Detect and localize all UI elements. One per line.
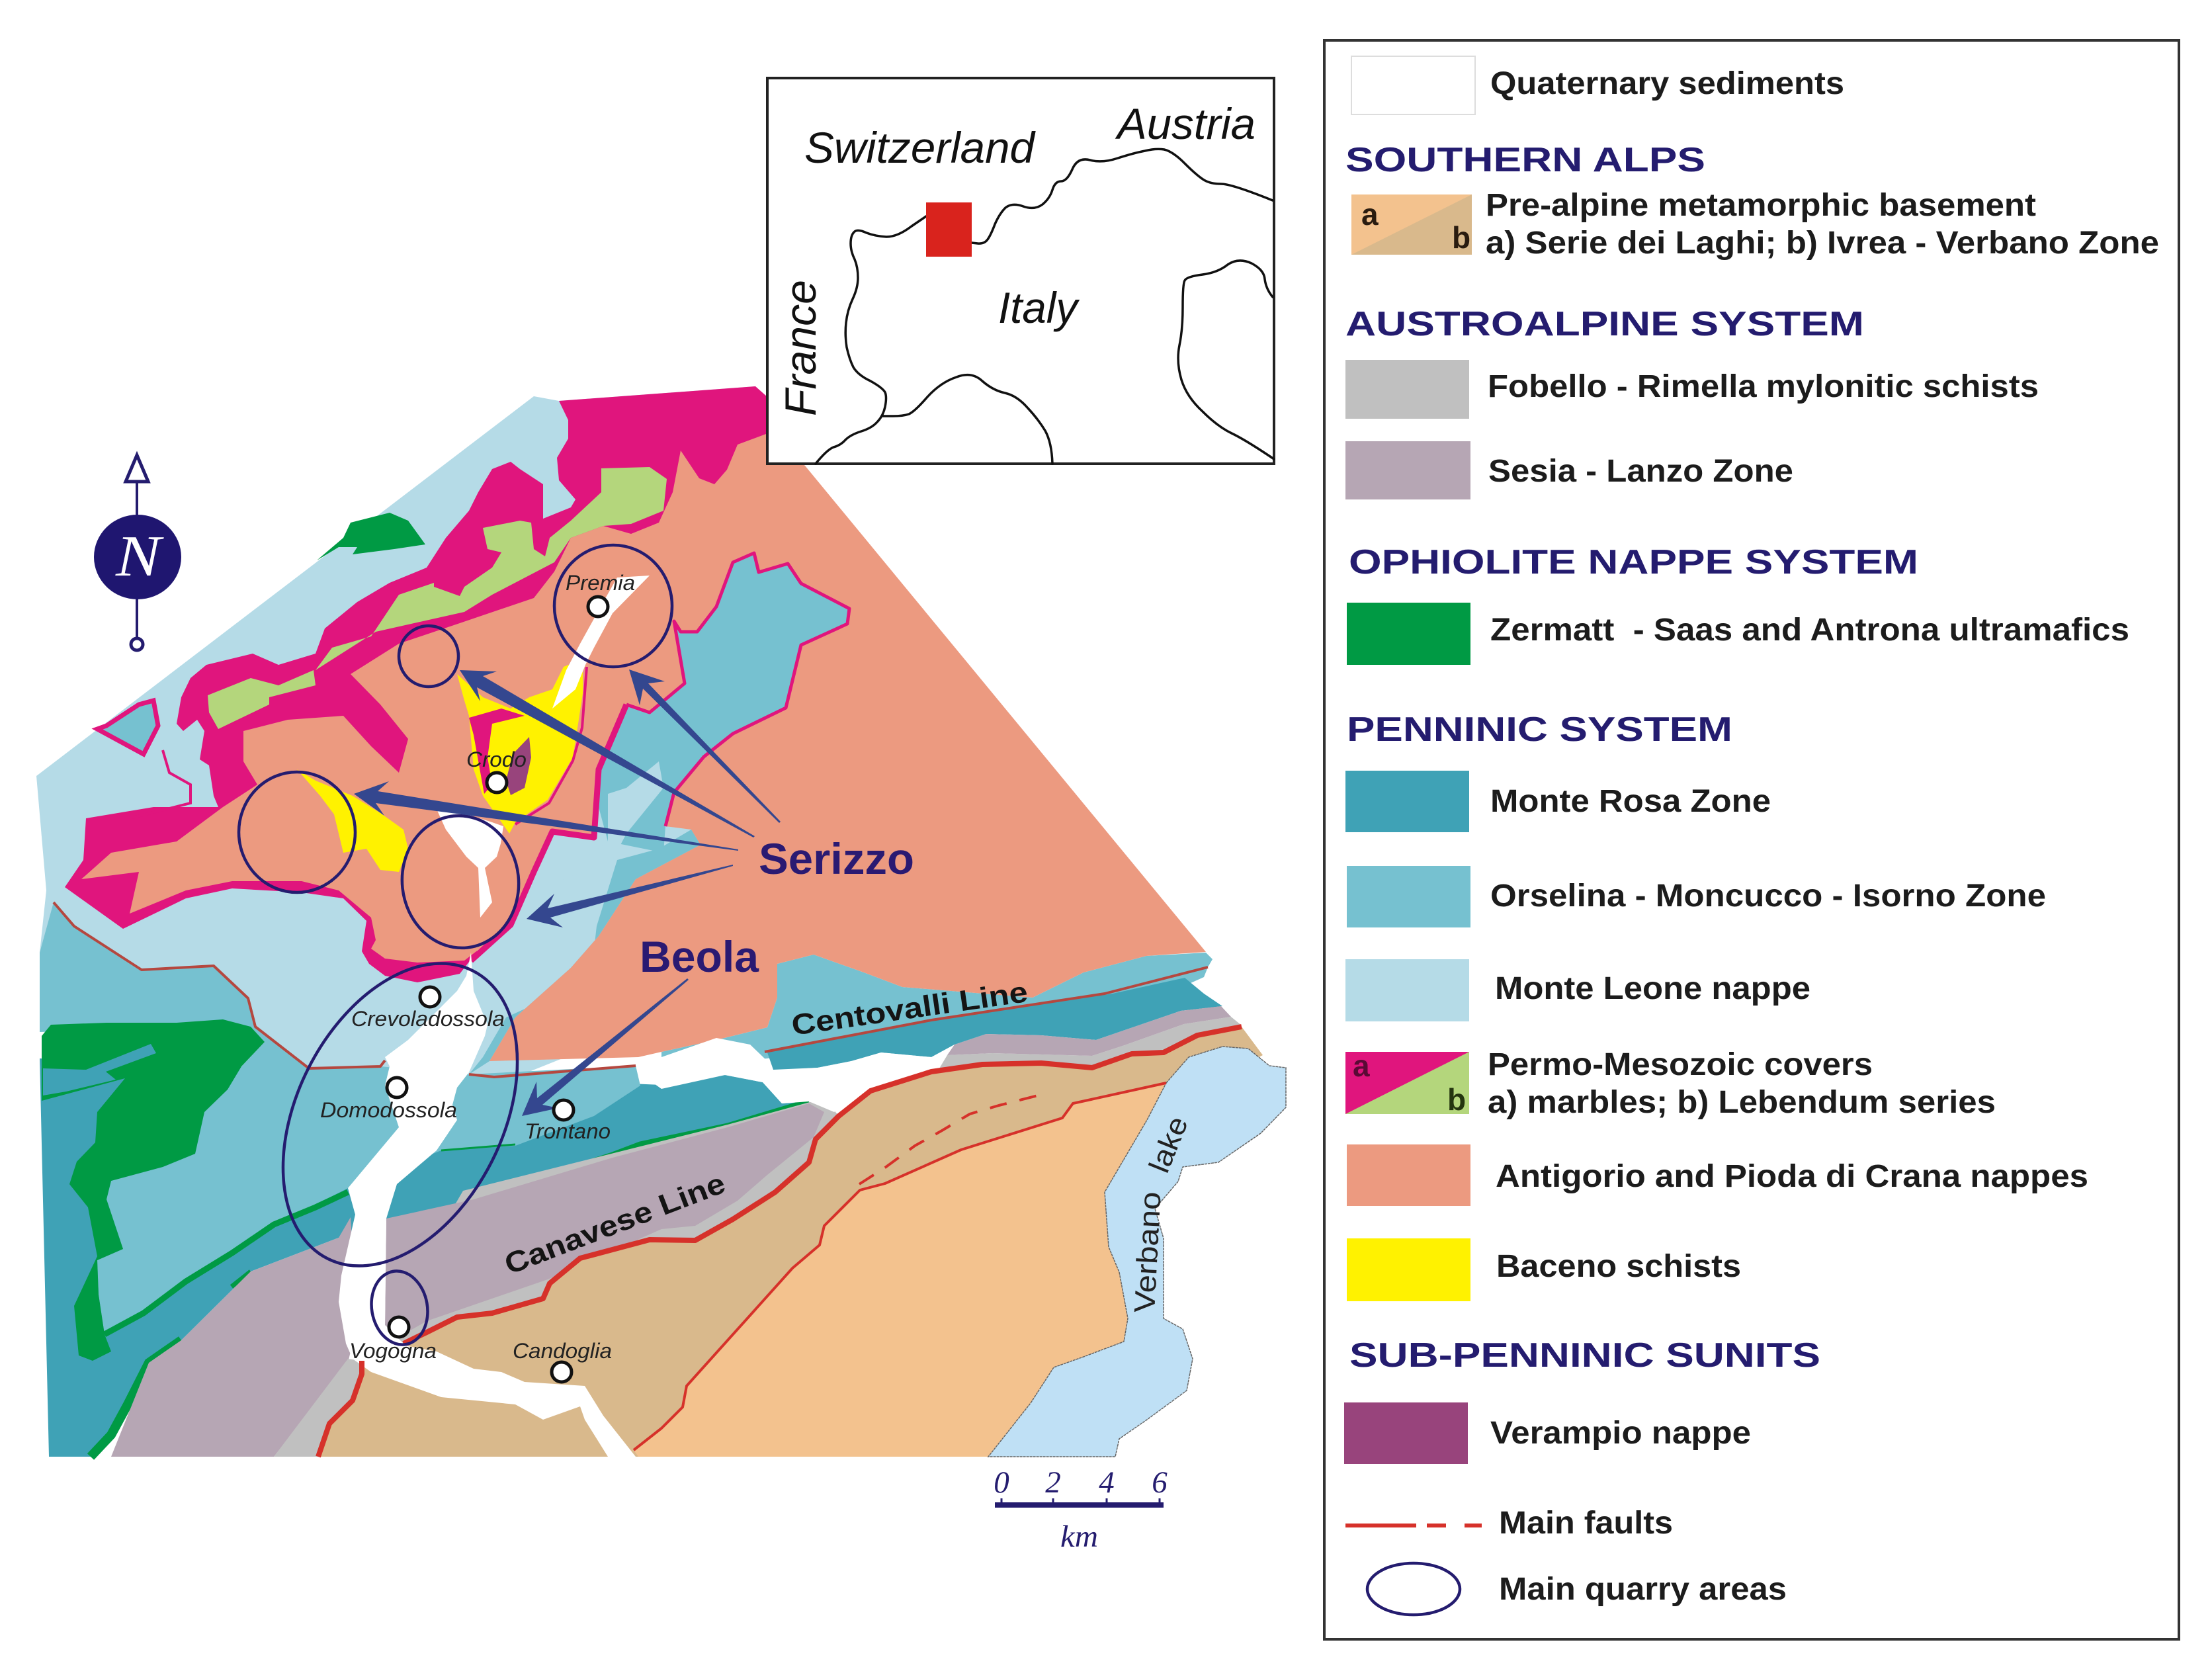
north arrow xyxy=(94,455,181,650)
heading: Ophiolite: OPHIOLITE NAPPE SYSTEM xyxy=(1349,543,1918,581)
scale numbers xyxy=(994,1465,1168,1500)
legend: Baceno xyxy=(1347,1238,1741,1301)
town: Domodossola xyxy=(320,1078,457,1122)
legend: Pre-alpine basement: a xyxy=(1361,197,1379,232)
inset borders xyxy=(816,149,1274,464)
legend: Quaternary sediments xyxy=(1351,56,1844,114)
legend: Monte Rosa xyxy=(1345,771,1771,832)
legend: Antigorio: Antigorio and Pioda di Crana nappes xyxy=(1496,1159,2088,1194)
legend: Pre-alpine basement: a) Serie dei Laghi; b) Ivrea - Verbano Zone xyxy=(1486,226,2159,261)
marbles within Baceno xyxy=(469,709,525,794)
label: Italy: Italy xyxy=(998,283,1080,332)
Northern fault xyxy=(54,902,385,1068)
Monte Leone inner strip xyxy=(562,761,663,880)
salmon within Baceno xyxy=(515,667,587,824)
quarry: Vogogna xyxy=(366,1267,433,1349)
town: Candoglia: Candoglia xyxy=(513,1339,612,1363)
Verbano lake xyxy=(988,1047,1286,1457)
Sesia Lanzo west xyxy=(111,1217,357,1457)
legend: Sesia xyxy=(1345,441,1793,499)
marbles chain xyxy=(65,386,767,982)
Quaternary eastern valley xyxy=(638,1038,955,1112)
legend: Monte Leone: Monte Leone nappe xyxy=(1495,971,1810,1006)
legend: Main quarry areas: Main quarry areas xyxy=(1499,1572,1787,1607)
legend: Baceno: Baceno schists xyxy=(1496,1249,1741,1284)
town: Crodo: Crodo xyxy=(466,748,527,771)
inset location map xyxy=(767,78,1274,464)
Serie dei Laghi fault xyxy=(634,1083,1166,1450)
legend: Pre-alpine basement: Pre-alpine metamorphic basement xyxy=(1486,188,2036,223)
Orselina small patch west xyxy=(97,701,158,754)
town: Candoglia xyxy=(513,1339,612,1382)
legend: Main faults: Main faults xyxy=(1499,1506,1673,1541)
quarry: small xyxy=(399,626,458,687)
Zermatt ultramafics north xyxy=(317,513,425,560)
town: Trontano: Trontano xyxy=(525,1119,611,1143)
label: Serizzo: Serizzo xyxy=(759,834,914,883)
legend: Permo-Mesozoic: a) marbles; b) Lebendum series xyxy=(1488,1085,1996,1120)
inset frame xyxy=(767,78,1274,464)
quarry ellipses xyxy=(235,545,672,1349)
Serie dei Laghi xyxy=(634,1083,1166,1457)
legend: Permo-Mesozoic: a xyxy=(1353,1049,1370,1083)
Serizzo arrows xyxy=(354,669,781,927)
legend: Main quarry areas xyxy=(1367,1563,1787,1615)
legend: Quaternary sediments: Quaternary sediments xyxy=(1490,66,1844,101)
legend: Fobello xyxy=(1345,360,2039,419)
town: Trontano xyxy=(525,1100,611,1143)
label: Canavese Line: Canavese Line xyxy=(500,1167,730,1281)
Antigorio and Pioda di Crana nappes xyxy=(81,434,1206,1061)
Lebendum series west xyxy=(208,670,316,729)
thin green bands xyxy=(105,1192,348,1334)
scale numbers: 2 xyxy=(1045,1465,1061,1500)
Verampio nappe xyxy=(506,737,531,795)
label: France: France xyxy=(776,280,825,416)
town: Crevoladossola: Crevoladossola xyxy=(351,1007,505,1031)
Orselina eastern band xyxy=(661,953,1212,1068)
Fobello grey west xyxy=(274,1359,362,1457)
town: Premia: Premia xyxy=(566,571,635,595)
legend: Pre-alpine basement xyxy=(1351,188,2159,261)
Ivrea Verbano zone xyxy=(318,1027,1263,1457)
scale bar xyxy=(994,1465,1168,1554)
north arrow disc xyxy=(94,515,181,599)
legend panel xyxy=(1324,40,2179,1639)
Fobello grey east xyxy=(385,1098,839,1344)
scale unit: km xyxy=(1060,1520,1098,1554)
scale line xyxy=(995,1502,1164,1508)
legend: Permo-Mesozoic xyxy=(1345,1047,1996,1120)
heading: Penninic: PENNINIC SYSTEM xyxy=(1347,710,1732,749)
quarry: Domodossola xyxy=(235,924,565,1305)
town: Vogogna xyxy=(349,1317,437,1363)
Sesia Lanzo east xyxy=(385,1103,824,1334)
Orselina zone xyxy=(40,902,640,1334)
Dashed fault xyxy=(859,1094,1046,1184)
Baceno schists west xyxy=(297,769,408,872)
Orselina strip xyxy=(469,830,701,1074)
Monte Rosa zone xyxy=(40,1058,809,1457)
legend: Sesia: Sesia - Lanzo Zone xyxy=(1488,454,1793,489)
legend: Fobello: Fobello - Rimella mylonitic schists xyxy=(1488,369,2039,404)
legend: Orselina xyxy=(1347,866,2046,927)
legend: Permo-Mesozoic: Permo-Mesozoic covers xyxy=(1488,1047,1873,1082)
Canavese fault xyxy=(404,1027,1242,1344)
marble outlines xyxy=(626,553,849,826)
Monte Rosa eastern band xyxy=(767,978,1222,1070)
quarry: west xyxy=(239,772,355,892)
legend: Verampio xyxy=(1344,1402,1751,1464)
Quaternary Premia xyxy=(552,576,650,709)
study area square xyxy=(926,202,972,257)
heading: Sub-Penninic: SUB-PENNINIC SUNITS xyxy=(1349,1336,1820,1375)
Monte Rosa stripes in ultramafics xyxy=(43,1044,156,1095)
Lebendum series east xyxy=(316,467,667,670)
town markers xyxy=(320,571,635,1382)
north arrow foot xyxy=(131,638,143,650)
town: Crevoladossola xyxy=(351,987,505,1031)
legend: Antigorio xyxy=(1347,1144,2088,1206)
label: Centovalli Line: Centovalli Line xyxy=(789,976,1030,1042)
quarry: middle xyxy=(396,810,525,954)
legend frame xyxy=(1324,40,2179,1639)
Zermatt ultramafics west xyxy=(42,1019,265,1361)
quarry: Premia xyxy=(554,545,672,667)
heading: Southern Alps: SOUTHERN ALPS xyxy=(1345,141,1705,179)
Quaternary middle xyxy=(437,809,503,918)
scale numbers: 6 xyxy=(1152,1465,1168,1500)
legend: Zermatt: Zermatt - Saas and Antrona ultramafics xyxy=(1490,613,2129,648)
Monte Leone nappe xyxy=(36,386,794,1085)
Sesia Lanzo north east xyxy=(947,1006,1231,1056)
Fobello grey north east xyxy=(939,1017,1242,1068)
north arrow shaft xyxy=(136,482,138,638)
label: Switzerland: Switzerland xyxy=(804,123,1036,172)
label: Verbano: Verbano xyxy=(1128,1191,1168,1314)
legend: Monte Rosa: Monte Rosa Zone xyxy=(1490,784,1771,819)
Beola arrow xyxy=(522,978,689,1116)
legend: Pre-alpine basement: b xyxy=(1452,220,1470,255)
scale numbers: 4 xyxy=(1099,1465,1115,1500)
arrow to Premia xyxy=(629,669,781,823)
Quaternary main valley xyxy=(339,953,636,1457)
legend: Permo-Mesozoic: b xyxy=(1447,1082,1466,1117)
north arrow head xyxy=(126,455,148,482)
label: lake: lake xyxy=(1143,1112,1195,1178)
arrow to west quarry xyxy=(354,781,738,851)
legend: Zermatt xyxy=(1347,603,2129,665)
scale numbers: 0 xyxy=(994,1465,1009,1500)
Baceno schists central xyxy=(457,659,583,834)
town: Premia xyxy=(566,571,635,617)
legend: Verampio: Verampio nappe xyxy=(1490,1416,1751,1451)
Main faults xyxy=(54,902,1242,1457)
label: Austria: Austria xyxy=(1115,99,1255,148)
geological map xyxy=(36,386,1286,1457)
Centovalli fault xyxy=(765,967,1208,1052)
legend: Orselina: Orselina - Moncucco - Isorno Zone xyxy=(1490,879,2046,914)
heading: Austroalpine system: AUSTROALPINE SYSTEM xyxy=(1345,305,1864,343)
legend: Monte Leone xyxy=(1345,959,1810,1021)
scale ticks xyxy=(1001,1498,1160,1503)
town: Vogogna: Vogogna xyxy=(349,1339,437,1363)
town: Domodossola: Domodossola xyxy=(320,1098,457,1122)
town: Crodo xyxy=(466,748,527,793)
arrow to small quarry xyxy=(460,670,755,838)
label: Beola: Beola xyxy=(640,932,759,981)
north arrow letter: N xyxy=(115,525,164,589)
arrow to middle quarry xyxy=(527,865,733,927)
Orselina north east patch xyxy=(597,553,849,853)
